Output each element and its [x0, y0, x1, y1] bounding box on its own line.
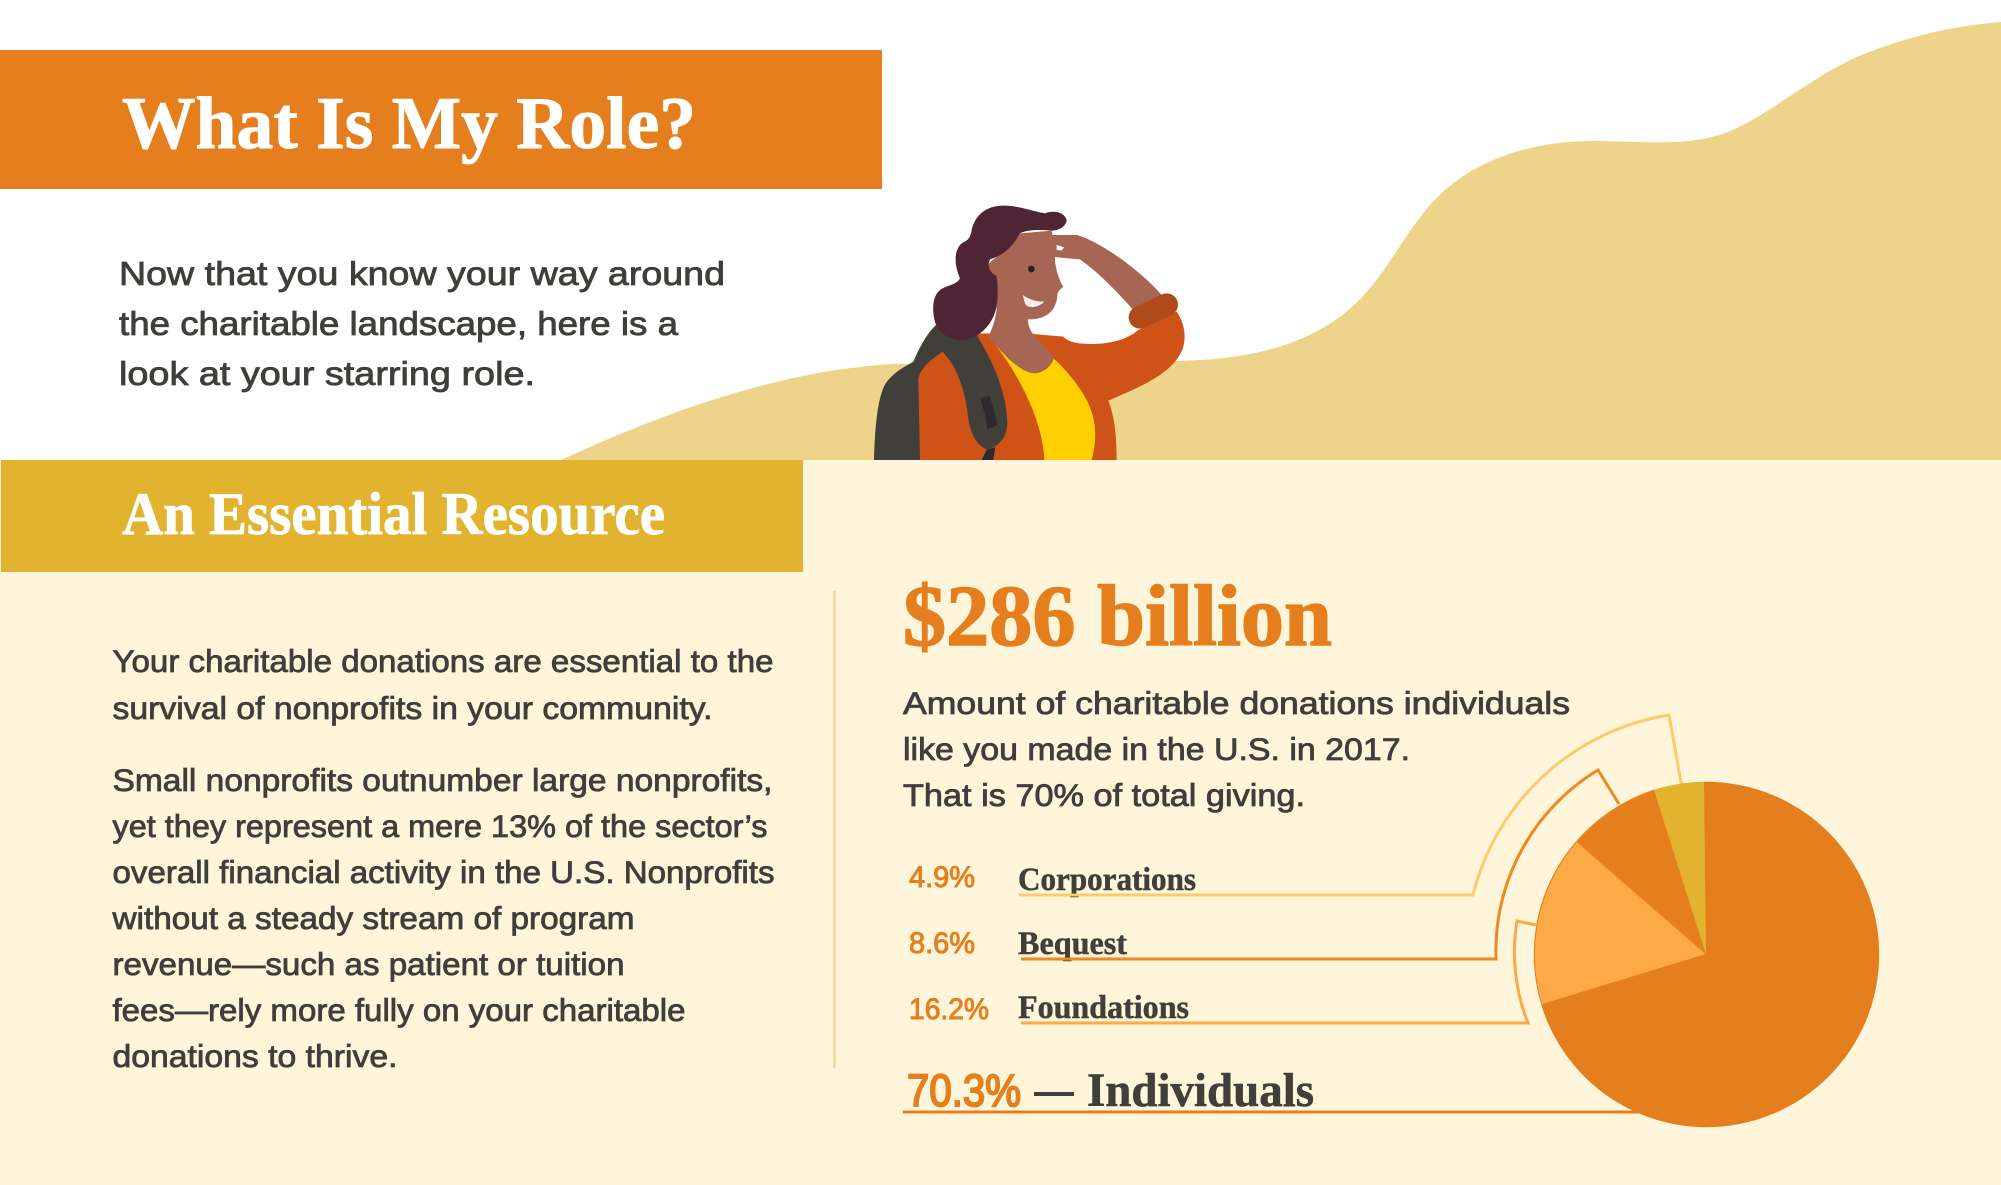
left body text: without a steady stream of program — [111, 900, 634, 936]
left body text — [111, 643, 774, 1074]
section heading banner — [1, 460, 803, 572]
statistic description: That is 70% of total giving. — [903, 777, 1305, 813]
intro text: the charitable landscape, here is a — [119, 305, 679, 342]
landscape hill — [561, 22, 2001, 460]
title banner — [0, 50, 882, 189]
statistic description — [903, 685, 1570, 813]
left body text: Small nonprofits outnumber large nonprofits, — [112, 762, 773, 798]
legend row: bequest: 8.6% — [909, 927, 975, 960]
left body text: yet they represent a mere 13% of the sector’s — [112, 808, 768, 844]
legend row: corporations: 4.9% — [909, 861, 975, 894]
intro text: Now that you know your way around — [119, 255, 725, 292]
legend row: individuals — [903, 1064, 1645, 1117]
illustration: woman with backpack shading her eyes — [874, 206, 1185, 460]
legend row: corporations — [909, 715, 1682, 898]
legend row: foundations — [909, 921, 1536, 1026]
left body text: fees—rely more fully on your charitable — [112, 992, 686, 1028]
left body text: revenue—such as patient or tuition — [112, 946, 624, 982]
legend row: bequest: Bequest — [1018, 926, 1127, 962]
left body text: overall financial activity in the U.S. Nonprofits — [112, 854, 774, 890]
left body text: donations to thrive. — [112, 1038, 398, 1074]
legend row: individuals: 70.3% — [907, 1065, 1021, 1116]
legend row: bequest — [909, 770, 1619, 962]
intro text — [119, 255, 725, 392]
left body text: survival of nonprofits in your community. — [112, 690, 712, 726]
background: cream lower section — [0, 460, 2001, 1185]
section heading banner: An Essential Resource — [122, 481, 665, 547]
pie chart — [1534, 782, 1879, 1127]
legend row: individuals: Individuals — [1087, 1064, 1314, 1117]
legend row: foundations: 16.2% — [909, 993, 989, 1026]
intro text: look at your starring role. — [119, 355, 535, 392]
legend row: corporations: Corporations — [1018, 862, 1196, 898]
statistic description: Amount of charitable donations individuals — [903, 685, 1570, 721]
big statistic: $286 billion — [903, 567, 1332, 664]
title banner: What Is My Role? — [122, 83, 696, 165]
left body text: Your charitable donations are essential to the — [112, 643, 774, 679]
statistic description: like you made in the U.S. in 2017. — [903, 731, 1410, 767]
legend row: foundations: Foundations — [1018, 990, 1189, 1026]
